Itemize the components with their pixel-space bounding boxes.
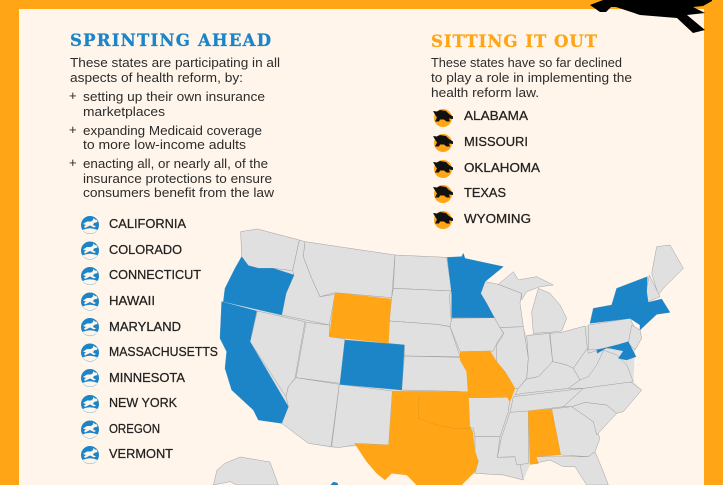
texas and oklahoma [355,391,478,485]
bullet list [69,88,275,200]
bullet list: to more low-income adults [83,137,247,152]
state: texas [355,397,478,485]
text block: sprinting intro: aspects of health reform, by: [70,70,243,85]
heading: sprinting ahead: SPRINTING AHEAD [70,31,271,50]
icon: rabbit california [81,216,99,234]
list: sitting states [433,109,541,229]
list: sprinting states: MARYLAND [109,320,181,334]
state: missouri [460,351,515,402]
state: alabama [528,409,561,464]
icon: turtle silhouette top right [590,0,712,33]
text block: sitting intro: health reform law. [431,85,539,100]
list: sitting states: TEXAS [464,186,506,200]
text block: sitting intro [431,55,632,100]
bullet list: setting up their own insurance [83,89,265,104]
text block: sprinting intro [70,55,280,85]
list: sprinting states: CONNECTICUT [109,268,201,282]
text block: sitting intro: to play a role in implementing the [431,70,632,85]
bullet list: + [69,122,77,137]
state: hawaii [331,482,338,485]
list: sprinting states: MINNESOTA [109,371,186,385]
text block: sprinting intro: These states are participating in all [70,55,280,70]
bullet list: expanding Medicaid coverage [83,123,262,138]
list: sitting states: MISSOURI [464,135,528,149]
state: oklahoma [392,391,470,428]
bullet list: consumers benefit from the law [83,185,275,200]
text block: sitting intro: These states have so far declined [431,55,622,70]
state: california [220,302,288,423]
bullet list: + [69,88,77,103]
list: sprinting states: VERMONT [109,447,173,461]
bullet list: insurance protections to ensure [83,171,272,186]
list: sitting states: ALABAMA [464,109,529,123]
bullet list: enacting all, or nearly all, of the [83,156,268,171]
list: sprinting states: HAWAII [109,294,155,308]
heading: sitting it out: SITTING IT OUT [431,32,598,51]
state: oregon [223,257,294,315]
state: wyoming [329,293,391,343]
list: sprinting states: COLORADO [109,243,182,257]
map: united states [213,229,683,485]
list: sprinting states: NEW YORK [109,396,178,410]
state: maryland [597,342,636,360]
bullet list: + [69,155,77,170]
state: minnesota [447,253,503,318]
list: sprinting states: OREGON [109,422,160,436]
icon: turtle alabama [433,109,453,127]
list: sitting states: OKLAHOMA [464,161,541,175]
state: colorado [340,340,404,390]
list: sprinting states: MASSACHUSETTS [109,345,218,359]
eastern states [447,245,683,485]
list: sitting states: WYOMING [464,212,531,226]
list: sprinting states [81,216,218,464]
state: massachusetts and connecticut [632,299,670,330]
state: new york and vermont [590,277,648,325]
western states [213,229,470,485]
bullet list: marketplaces [83,104,166,119]
list: sprinting states: CALIFORNIA [109,217,187,231]
